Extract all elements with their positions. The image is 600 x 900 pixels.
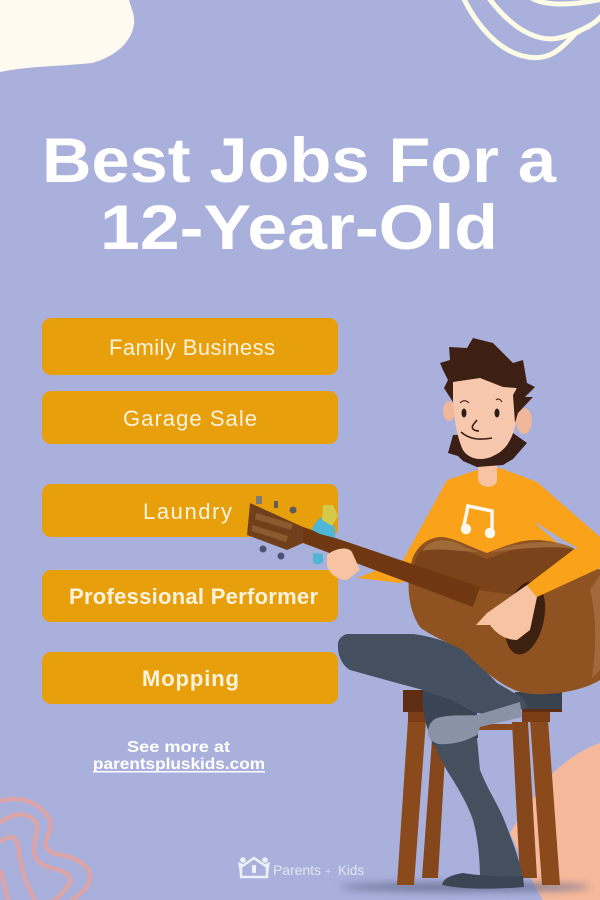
nose and smile bbox=[461, 420, 492, 439]
parrot bbox=[312, 505, 338, 564]
see more link bbox=[93, 739, 265, 773]
job: family business: Family Business bbox=[109, 335, 275, 360]
hair top bbox=[440, 338, 535, 423]
swirl: top right cream lines bbox=[463, 0, 600, 58]
see more link: See more at bbox=[127, 739, 231, 756]
stool front legs bbox=[397, 720, 426, 885]
job: garage sale: Garage Sale bbox=[123, 406, 257, 431]
crossed leg bbox=[338, 634, 528, 714]
left sleeve and torso bbox=[357, 468, 560, 583]
job: mopping: Mopping bbox=[142, 666, 239, 691]
blob: bottom left pink outline bbox=[0, 799, 90, 900]
job list bbox=[42, 318, 338, 704]
job: laundry: Laundry bbox=[143, 499, 232, 524]
title: 12-Year-Old bbox=[100, 193, 498, 263]
stool crossbar bbox=[470, 724, 515, 730]
right hand bbox=[476, 585, 537, 640]
job: garage sale bbox=[42, 391, 338, 444]
title: Best Jobs For a bbox=[42, 126, 557, 196]
job: professional performer bbox=[42, 570, 338, 622]
right upper sleeve bbox=[535, 482, 600, 560]
ears bbox=[443, 401, 455, 421]
icon: music note on shirt bbox=[462, 506, 494, 536]
blob: top left cream bbox=[0, 0, 134, 72]
right lower sleeve bbox=[527, 537, 600, 597]
job: professional performer: Professional Performer bbox=[69, 584, 318, 609]
guitar neck and headstock bbox=[247, 496, 480, 607]
floor shadow bbox=[340, 882, 590, 892]
illustration: guitarist bbox=[247, 338, 600, 892]
sock bbox=[428, 702, 522, 744]
see more link: parentspluskids.com bbox=[93, 756, 265, 773]
shoe bbox=[442, 873, 524, 889]
stool seat bbox=[403, 690, 425, 712]
far leg bbox=[433, 738, 523, 879]
logo: parents plus kids: Parents bbox=[273, 862, 321, 878]
blob: bottom right peach bbox=[510, 743, 600, 900]
job: laundry bbox=[42, 484, 338, 537]
logo: parents plus kids: + bbox=[325, 866, 331, 878]
left hand bbox=[327, 548, 360, 580]
neck bbox=[478, 455, 497, 487]
job: mopping bbox=[42, 652, 338, 704]
job: family business bbox=[42, 318, 338, 375]
logo: parents plus kids: Kids bbox=[338, 862, 364, 878]
logo: parents plus kids bbox=[238, 857, 364, 878]
icon: house with family bbox=[238, 857, 270, 877]
stool back legs bbox=[422, 740, 446, 878]
head bbox=[440, 338, 535, 467]
stool bbox=[397, 690, 562, 885]
face bbox=[453, 376, 518, 459]
eyes and brows bbox=[462, 408, 466, 418]
title bbox=[42, 126, 557, 263]
guitar body bbox=[409, 537, 600, 694]
lower hair bbox=[448, 433, 527, 467]
